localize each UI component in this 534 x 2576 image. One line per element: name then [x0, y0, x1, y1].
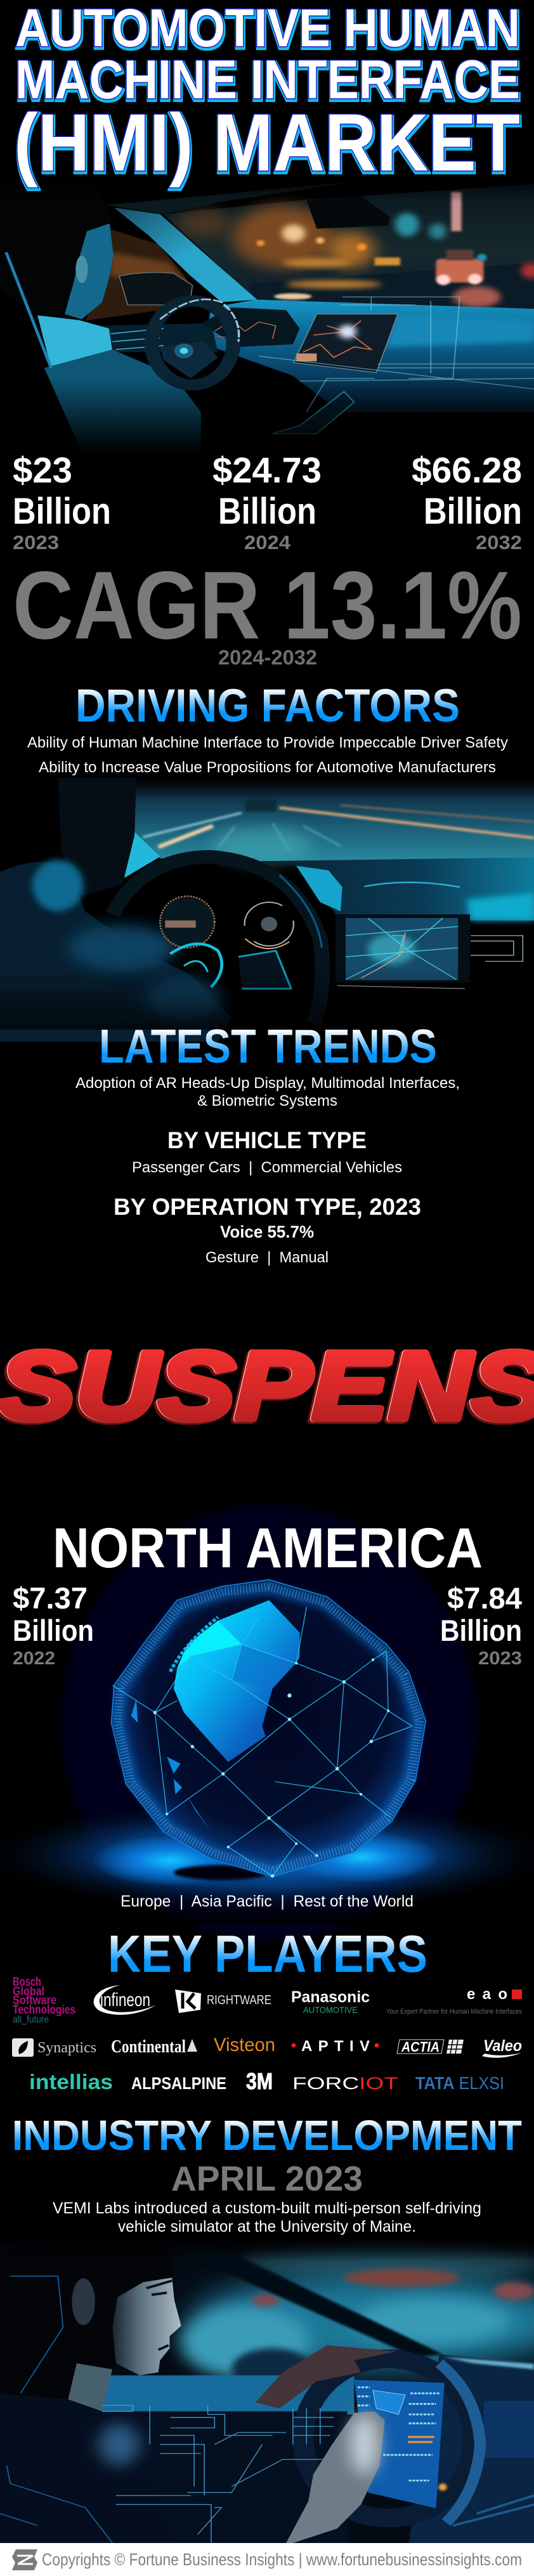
- hair: [0, 2243, 174, 2399]
- stat: North America 2022: Billion: [13, 1614, 94, 1647]
- dashboard top: [249, 857, 534, 921]
- lower console: [273, 392, 354, 434]
- driving factors text: Ability to Increase Value Propositions for Automotive Manufacturers: [39, 759, 496, 776]
- logo: Bosch Global Software Technologies: [13, 1976, 75, 2025]
- image bottom fade: [0, 969, 534, 1030]
- logo: Rightware: [175, 1990, 271, 2013]
- logo: ForcIoT: FORC IOT: [292, 2074, 398, 2093]
- CAGR period: 2024-2032: [218, 646, 317, 669]
- speckled rim: [117, 1586, 420, 1871]
- driver arm: [0, 860, 231, 1042]
- logo: Bosch Global Software Technologies: Technologies: [13, 2003, 75, 2017]
- driver silhouette: [58, 778, 136, 896]
- logo: Infineon: [94, 1985, 156, 2015]
- stat: 2024 market size: Billion: [218, 491, 316, 532]
- windscreen bright triangle: [124, 831, 160, 878]
- latest trends text: & Biometric Systems: [197, 1092, 337, 1110]
- by operation type heading: BY OPERATION TYPE, 2023: [114, 1194, 421, 1220]
- stat: North America 2023: 2023: [478, 1648, 522, 1669]
- driver head: [0, 184, 114, 320]
- vehicle type segments: Passenger Cars | Commercial Vehicles: [132, 1159, 402, 1176]
- stat: North America 2022: 2022: [13, 1648, 55, 1669]
- rim glow: [119, 1588, 417, 1868]
- logo: Actia: [397, 2039, 464, 2055]
- voice share: Voice 55.7%: [220, 1222, 314, 1241]
- floor glow: [0, 1797, 534, 1913]
- side window: [85, 229, 192, 321]
- holographic HUD lines: [259, 297, 534, 412]
- neck: [68, 2364, 112, 2411]
- network lines: [112, 1607, 412, 1876]
- stat: 2032 market size: [412, 450, 522, 553]
- logo: Visteon: Visteon: [214, 2035, 275, 2055]
- logo: Panasonic Automotive: Panasonic: [291, 1988, 370, 2006]
- navy halo: [62, 1505, 477, 1941]
- logo: Alps Alpine: ALPSALPINE: [131, 2074, 226, 2093]
- stat: North America 2023: Billion: [440, 1614, 522, 1647]
- glow fade below globe: [0, 1903, 534, 1924]
- hero bottom fade: [0, 379, 534, 452]
- dashboard band: [102, 2354, 534, 2544]
- sphere body: [112, 1580, 426, 1877]
- driver shirt: [6, 252, 201, 452]
- stat: North America 2023: [440, 1581, 522, 1669]
- driving factors text: Ability of Human Machine Interface to Provide Impeccable Driver Safety: [27, 734, 508, 751]
- steering wheel and cluster: [112, 857, 322, 1023]
- dashboard image: cockpit on highway: [0, 778, 534, 1042]
- stat: 2024 market size: $24.73: [212, 450, 322, 491]
- stat: North America 2022: $7.37: [13, 1581, 88, 1615]
- logo: Valeo: Valeo: [483, 2037, 522, 2055]
- logo: Infineon: infineon: [100, 1990, 150, 2010]
- development text: vehicle simulator at the University of Maine.: [118, 2218, 416, 2236]
- logo: Tata Elxsi: TATA ELXSI: [415, 2073, 504, 2093]
- stat: 2023 market size: 2023: [13, 531, 59, 553]
- stat: 2032 market size: Billion: [424, 491, 522, 532]
- by vehicle type heading: BY VEHICLE TYPE: [167, 1127, 367, 1153]
- centre touchscreen: [294, 314, 398, 373]
- latest trends heading: LATEST TRENDS: [99, 1019, 437, 1073]
- logo: EAO: [386, 1986, 522, 2016]
- title: [14, 0, 520, 188]
- stat: 2024 market size: [212, 450, 322, 553]
- eye and lips: [147, 2281, 172, 2350]
- holographic tablet: [354, 2380, 447, 2508]
- image top fade: [0, 2237, 534, 2258]
- stat: 2024 market size: 2024: [244, 531, 291, 553]
- hero image: driver at night with HMI dashboard: [0, 171, 534, 452]
- instrument cluster: [201, 307, 300, 347]
- logo: Panasonic Automotive: AUTOMOTIVE: [303, 2005, 358, 2015]
- infotainment screen: [335, 914, 470, 988]
- ear: [72, 2278, 95, 2325]
- date: APRIL 2023: [171, 2159, 363, 2198]
- windscreen pillar: [223, 2257, 443, 2357]
- headliner and rear-view mirror: [105, 179, 390, 229]
- stat: 2023 market size: [13, 450, 111, 553]
- logo: Aptiv: APTIV: [301, 2038, 370, 2055]
- stat: 2032 market size: $66.28: [412, 450, 522, 491]
- development text: [53, 2199, 481, 2236]
- logo: Bosch Global Software Technologies: Software: [13, 1994, 56, 2007]
- hand on wheel: [256, 2345, 397, 2409]
- hand on tablet: [286, 2411, 385, 2543]
- logo: Continental: Continental: [111, 2037, 186, 2057]
- door mirror: [119, 273, 192, 305]
- logo: Rightware: RIGHTWARE: [207, 1993, 271, 2007]
- logo: Bosch Global Software Technologies: Bosch: [13, 1976, 41, 1989]
- globe illustration: [0, 1505, 534, 1941]
- stat: 2032 market size: 2032: [476, 531, 522, 553]
- side mirror blur: [227, 2343, 310, 2375]
- stat: 2023 market size: $23: [13, 450, 72, 491]
- logo: Actia: ACTIA: [401, 2039, 440, 2055]
- air vent outline: [471, 936, 523, 961]
- steering wheel: [152, 299, 239, 385]
- body: [0, 2275, 150, 2543]
- operation type segments: Gesture | Manual: [205, 1249, 329, 1266]
- steering wheel: [303, 2359, 480, 2523]
- other regions: Europe | Asia Pacific | Rest of the World: [120, 1893, 414, 1910]
- stat: North America 2023: $7.84: [447, 1581, 522, 1615]
- key players heading: KEY PLAYERS: [108, 1924, 427, 1983]
- north america heading: NORTH AMERICA: [53, 1516, 483, 1579]
- red banner text: SUSPENS: [0, 1332, 534, 1440]
- footer logo: [12, 2549, 37, 2570]
- driving factors heading: DRIVING FACTORS: [75, 680, 460, 732]
- network nodes: [153, 1659, 389, 1878]
- logo: Synaptics: [12, 2038, 96, 2057]
- image: woman using holographic car interface: [0, 2237, 534, 2544]
- footer bar: [0, 2543, 534, 2576]
- latest trends text: Adoption of AR Heads-Up Display, Multimodal Interfaces,: [75, 1075, 460, 1092]
- driving factors text: [27, 734, 508, 776]
- face: [112, 2277, 181, 2376]
- circuit overlay: [102, 2405, 334, 2543]
- logo: Intellias: intellias: [29, 2070, 113, 2094]
- latest trends text: [75, 1075, 460, 1110]
- dashboard: [95, 300, 534, 412]
- continent: [131, 1600, 300, 1832]
- A-pillar: [114, 207, 257, 302]
- logo: Bosch Global Software Technologies: Global: [13, 1985, 44, 1998]
- blurred street scene: [181, 2246, 534, 2378]
- logo: EAO: eao: [467, 1986, 507, 2003]
- logo: Panasonic Automotive: [291, 1988, 370, 2015]
- logo: Synaptics: Synaptics: [37, 2040, 96, 2056]
- development text: VEMI Labs introduced a custom-built multi-person self-driving: [53, 2199, 481, 2217]
- stat: 2023 market size: Billion: [13, 491, 111, 532]
- logo: Bosch Global Software Technologies: alt_future: [13, 2014, 49, 2025]
- stat: North America 2022: [13, 1581, 94, 1669]
- logo: 3M: 3M: [246, 2068, 273, 2094]
